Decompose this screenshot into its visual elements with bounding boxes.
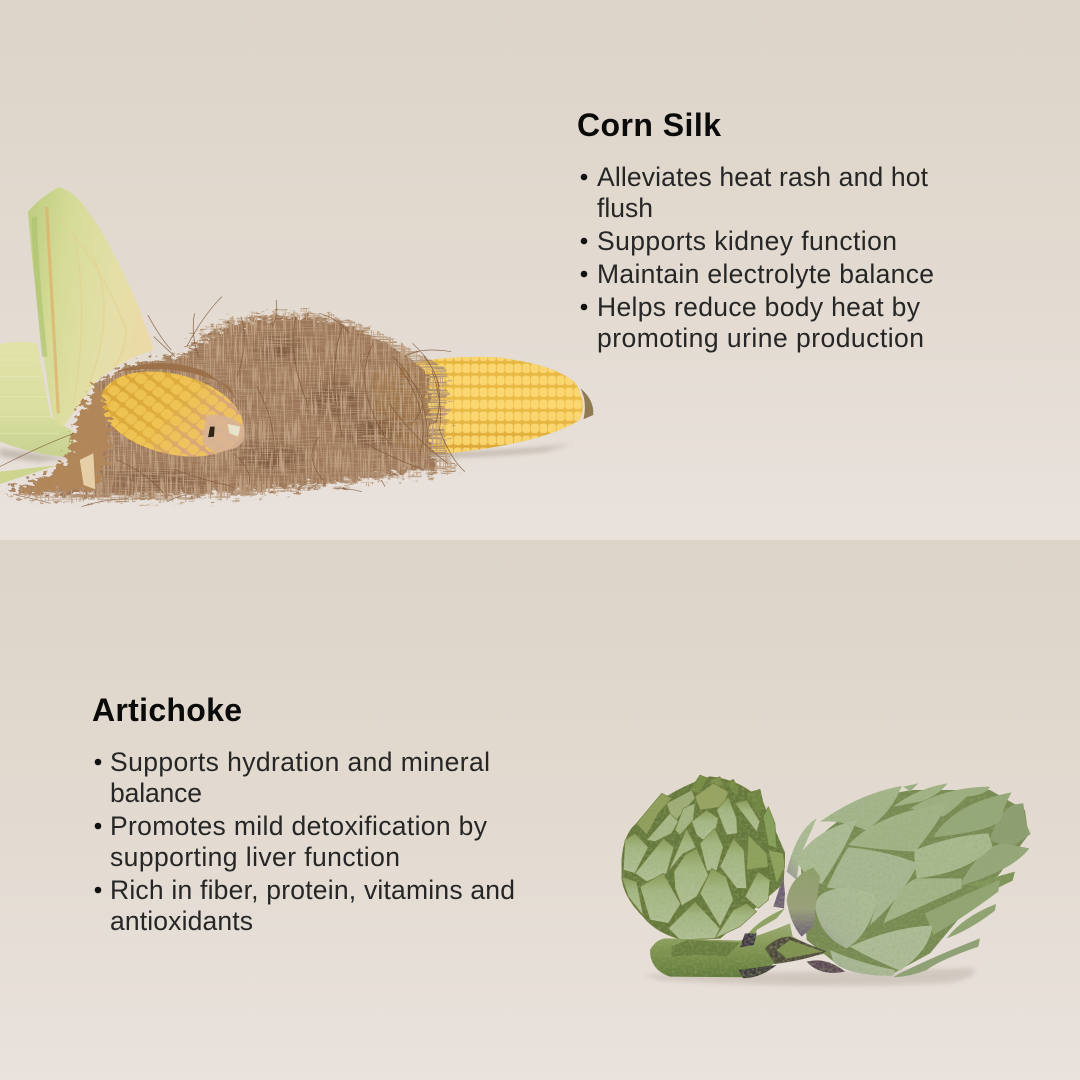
bullet: hydration and minerals: balance [110,778,202,808]
bullet: reduces body heat: promoting urine production [597,323,924,353]
silk mass [4,311,459,502]
bullet: kidney function: Supports kidney function [597,226,897,256]
bullet: alleviates heat rash: Alleviates heat rash and hot [597,162,929,192]
bullet: fiber and vitamins [95,875,515,936]
fallen husk piece [0,465,58,484]
left cob tip [202,415,245,453]
silk fibres, light [4,311,459,502]
bullet: mild detoxification: supporting liver function [110,842,400,872]
left corn cob [87,356,257,472]
ground shadow [643,968,975,986]
panel: artichoke [0,540,1080,1080]
bullet: fiber and vitamins: antioxidants [110,906,253,936]
back husk [0,342,76,457]
silk fibres, dark [4,311,459,502]
bullet: hydration and minerals: Supports hydration and mineral [110,747,490,777]
dark silk shadows [105,337,401,487]
right corn cob [373,357,593,455]
bullet: electrolyte balance: Maintain electrolyte balance [597,259,934,289]
left artichoke [622,775,785,940]
silk tuft over left cob [16,363,249,492]
bullet: mild detoxification [95,811,488,872]
bullet: reduces body heat [581,292,924,353]
artichoke stem [650,908,827,978]
bullet: alleviates heat rash: flush [597,193,653,223]
bullet: alleviates heat rash [581,162,929,223]
bullet list: artichoke benefits [95,747,515,936]
bullet: mild detoxification: Promotes mild detoxification by [110,811,488,841]
bullet: hydration and minerals [95,747,490,808]
cast shadows [0,444,572,462]
silk body [8,317,440,495]
panel: corn silk [0,0,1080,540]
loose silk strands [0,297,465,507]
illustration: artichokes [622,775,1031,986]
illustration: corn cobs and silk [0,187,593,507]
panel background: corn silk [0,0,1080,540]
right artichoke [787,783,1031,977]
panel background: artichoke [0,540,1080,1080]
heading: Artichoke: Artichoke [92,692,242,728]
heading: Corn Silk: Corn Silk [577,107,721,143]
bullet list: corn silk benefits [581,162,934,353]
front husk leaf [28,187,154,427]
bullet: fiber and vitamins: Rich in fiber, protein, vitamins and [110,875,515,905]
bullet: reduces body heat: Helps reduce body heat by [597,292,921,322]
